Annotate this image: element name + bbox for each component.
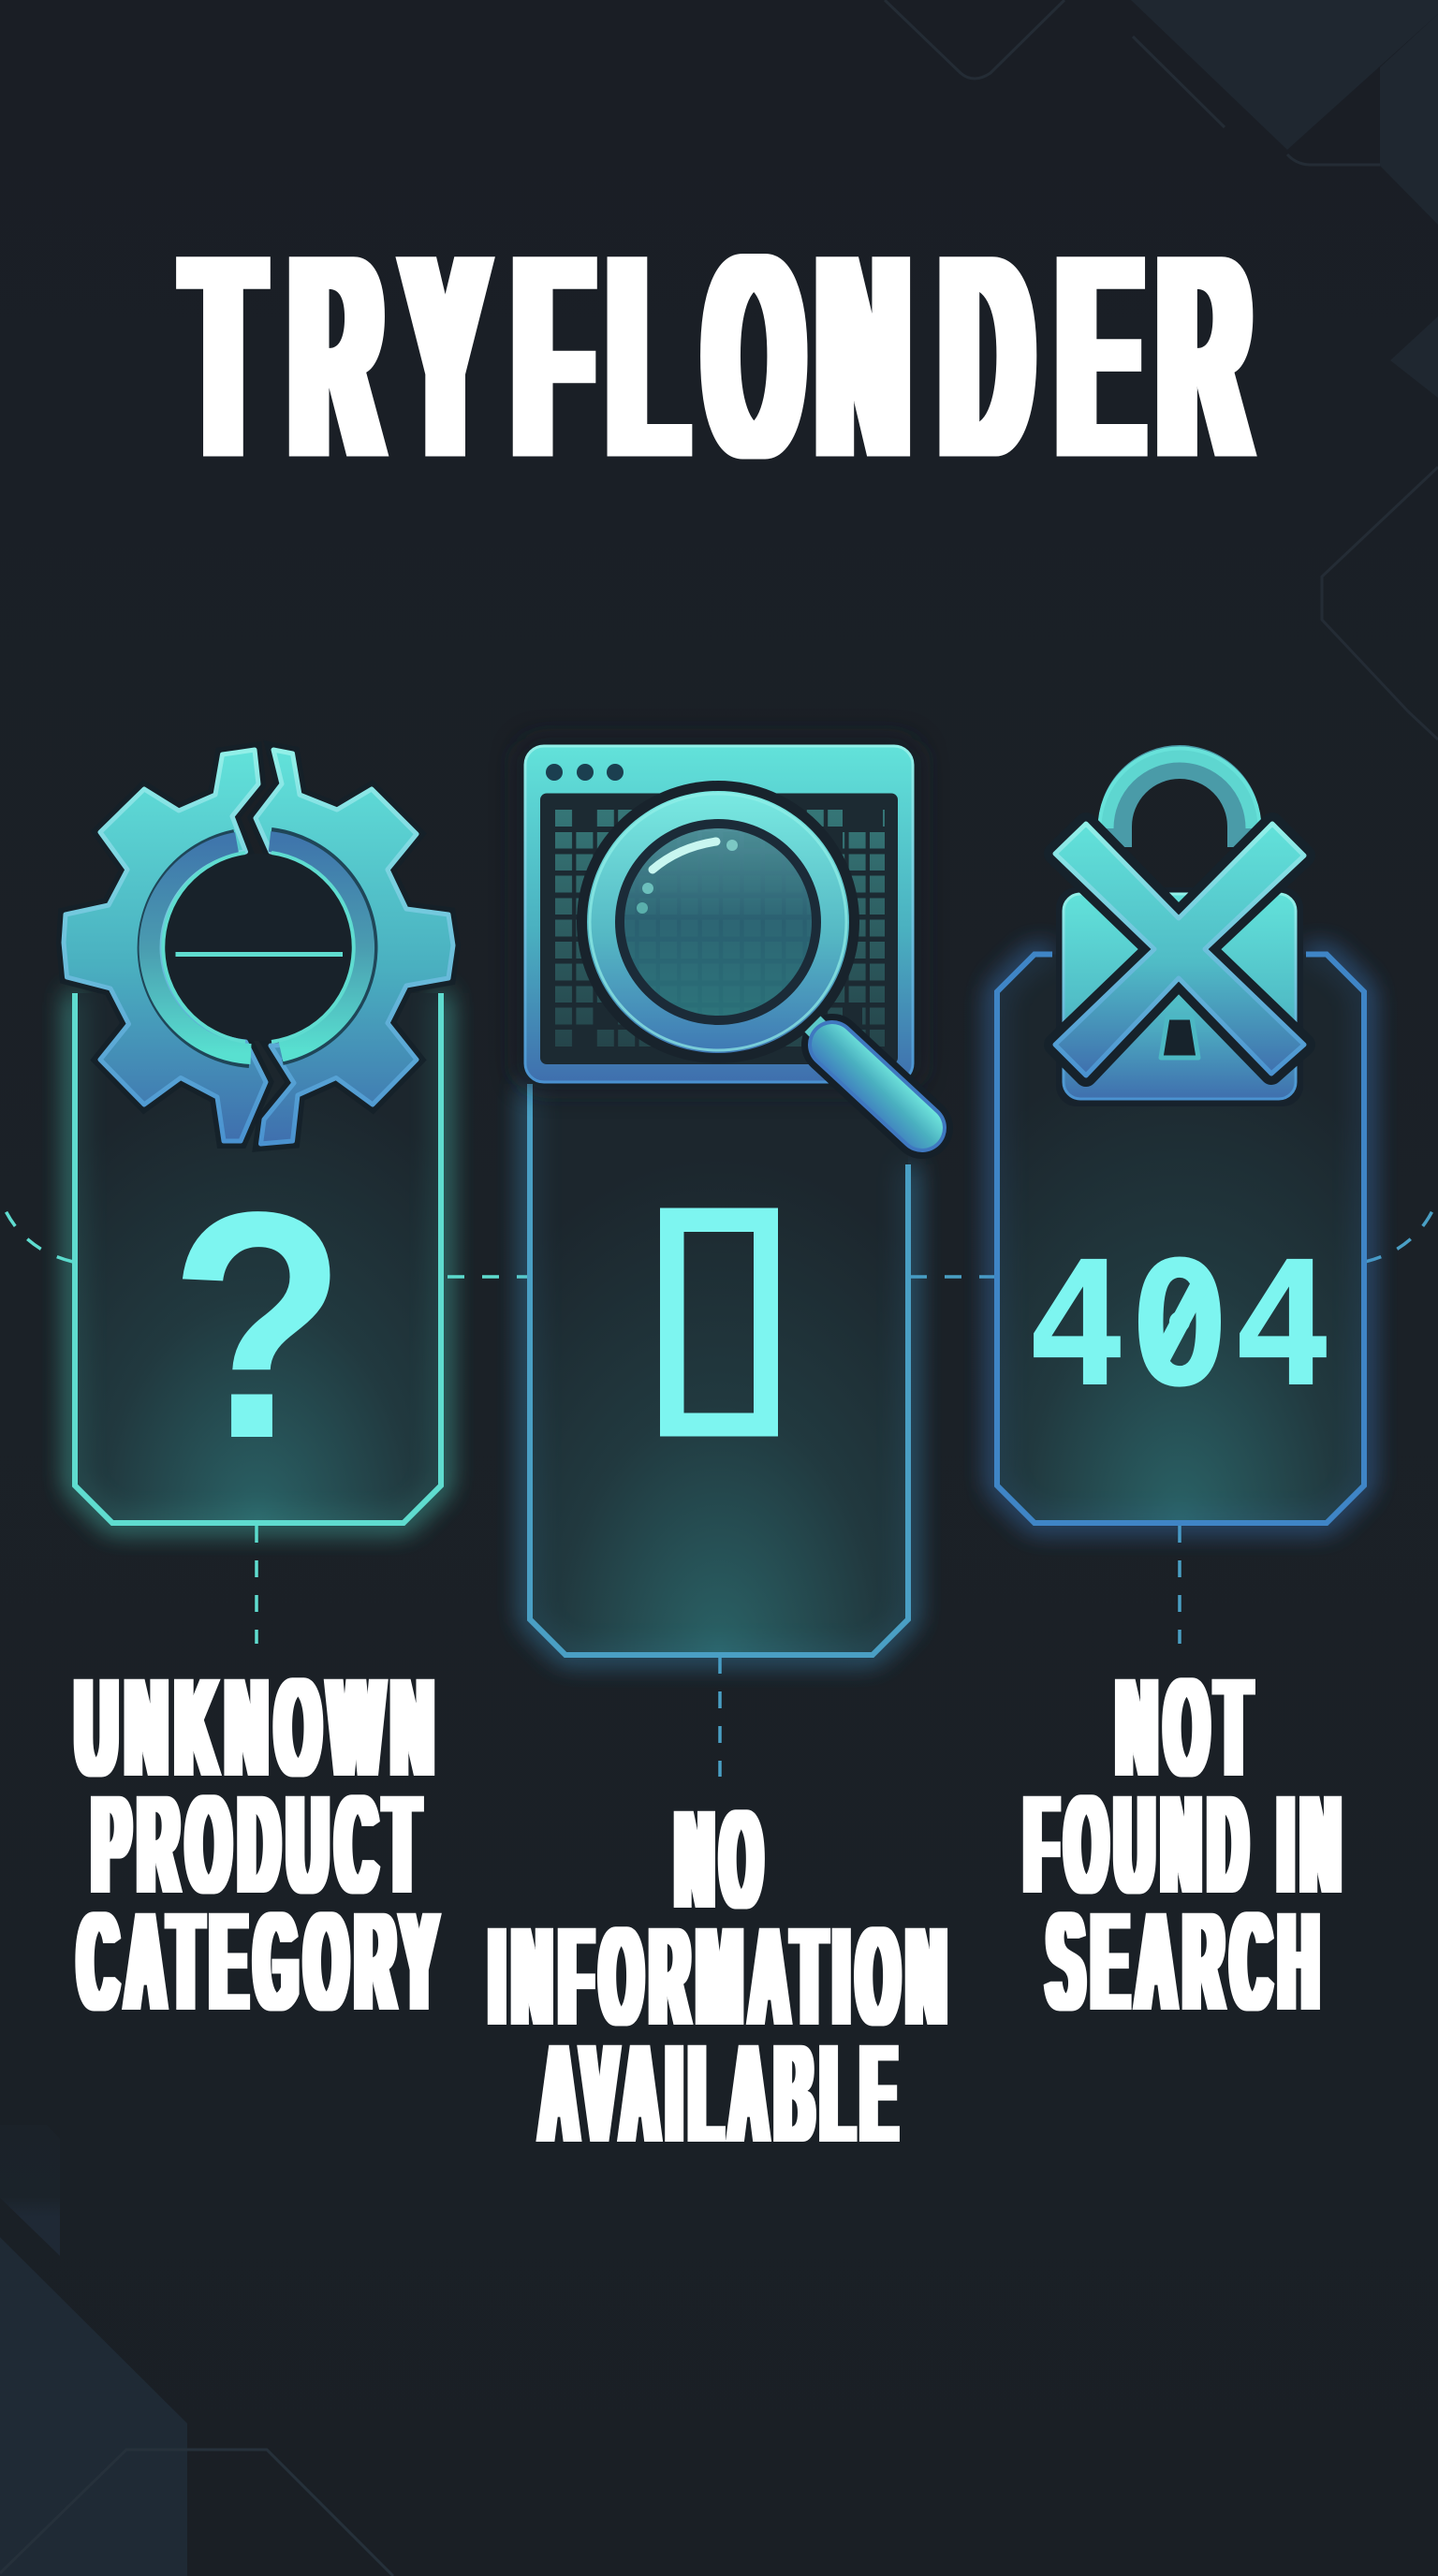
panel: no information available [517,738,922,1655]
panel: unknown product category [64,750,453,1523]
icon: browser window with magnifier [517,738,922,1128]
empty box glyph [660,1208,778,1436]
question mark: ? [169,1145,346,1506]
label: no information available [490,1780,954,2172]
text: CATEGORY [79,1882,446,2040]
icon: cracked gear [64,750,453,1144]
label: unknown product category [76,1648,446,2040]
text: PRODUCT [93,1765,428,1923]
icon: crossed-out padlock [1055,749,1304,1106]
label: not found in search [1025,1648,1348,2040]
404 code: 404 [1025,1225,1334,1426]
label: no information available: NO [676,1780,770,1938]
panel: not found in search [997,749,1364,1523]
text: UNKNOWN [76,1648,442,1806]
dashed connectors [0,1198,1438,1777]
title: TRYFLONDER [186,195,1248,519]
